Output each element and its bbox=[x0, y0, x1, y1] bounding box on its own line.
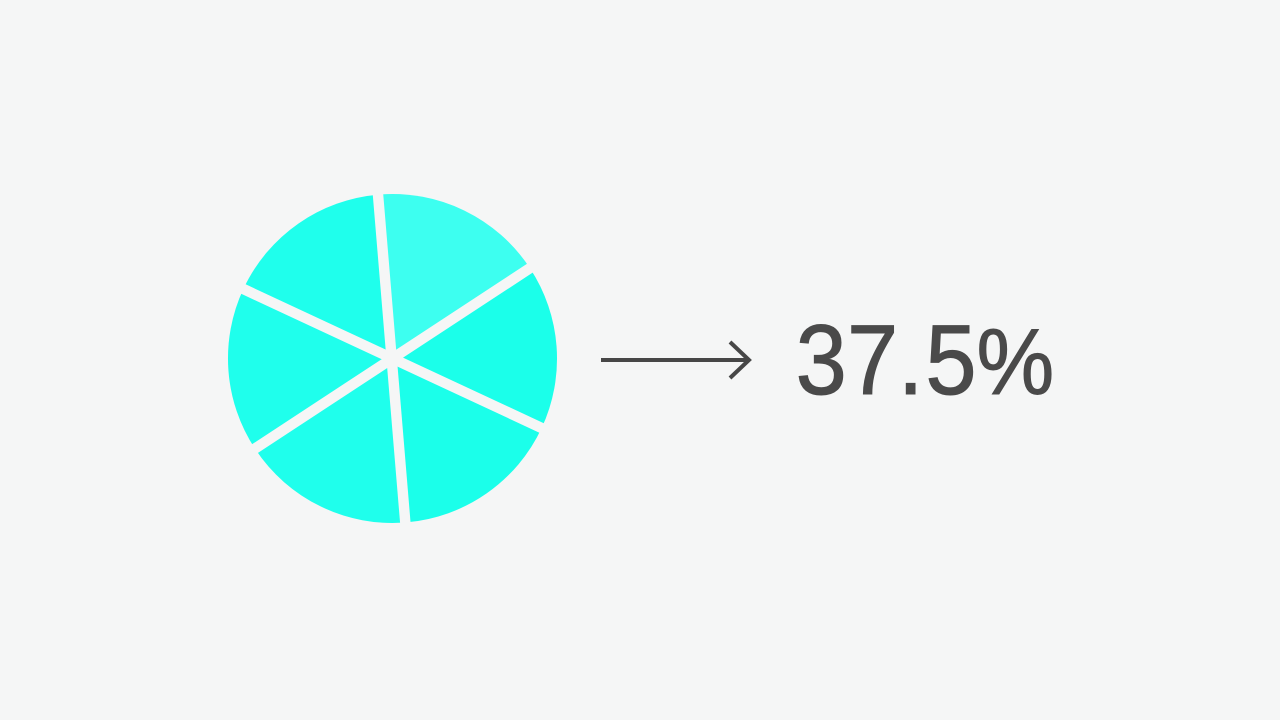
slice: right bbox=[392, 268, 557, 428]
slice: bottom left bbox=[255, 358, 406, 523]
pie chart: six slices, one highlighted bbox=[228, 189, 557, 528]
slice: top right (lighter) bbox=[379, 194, 530, 358]
slice: top left bbox=[243, 195, 392, 358]
arrow bbox=[601, 342, 749, 378]
slice: bottom right bbox=[392, 358, 542, 522]
percentage value: 37.5% bbox=[796, 305, 1054, 416]
slice: left bbox=[228, 289, 392, 449]
